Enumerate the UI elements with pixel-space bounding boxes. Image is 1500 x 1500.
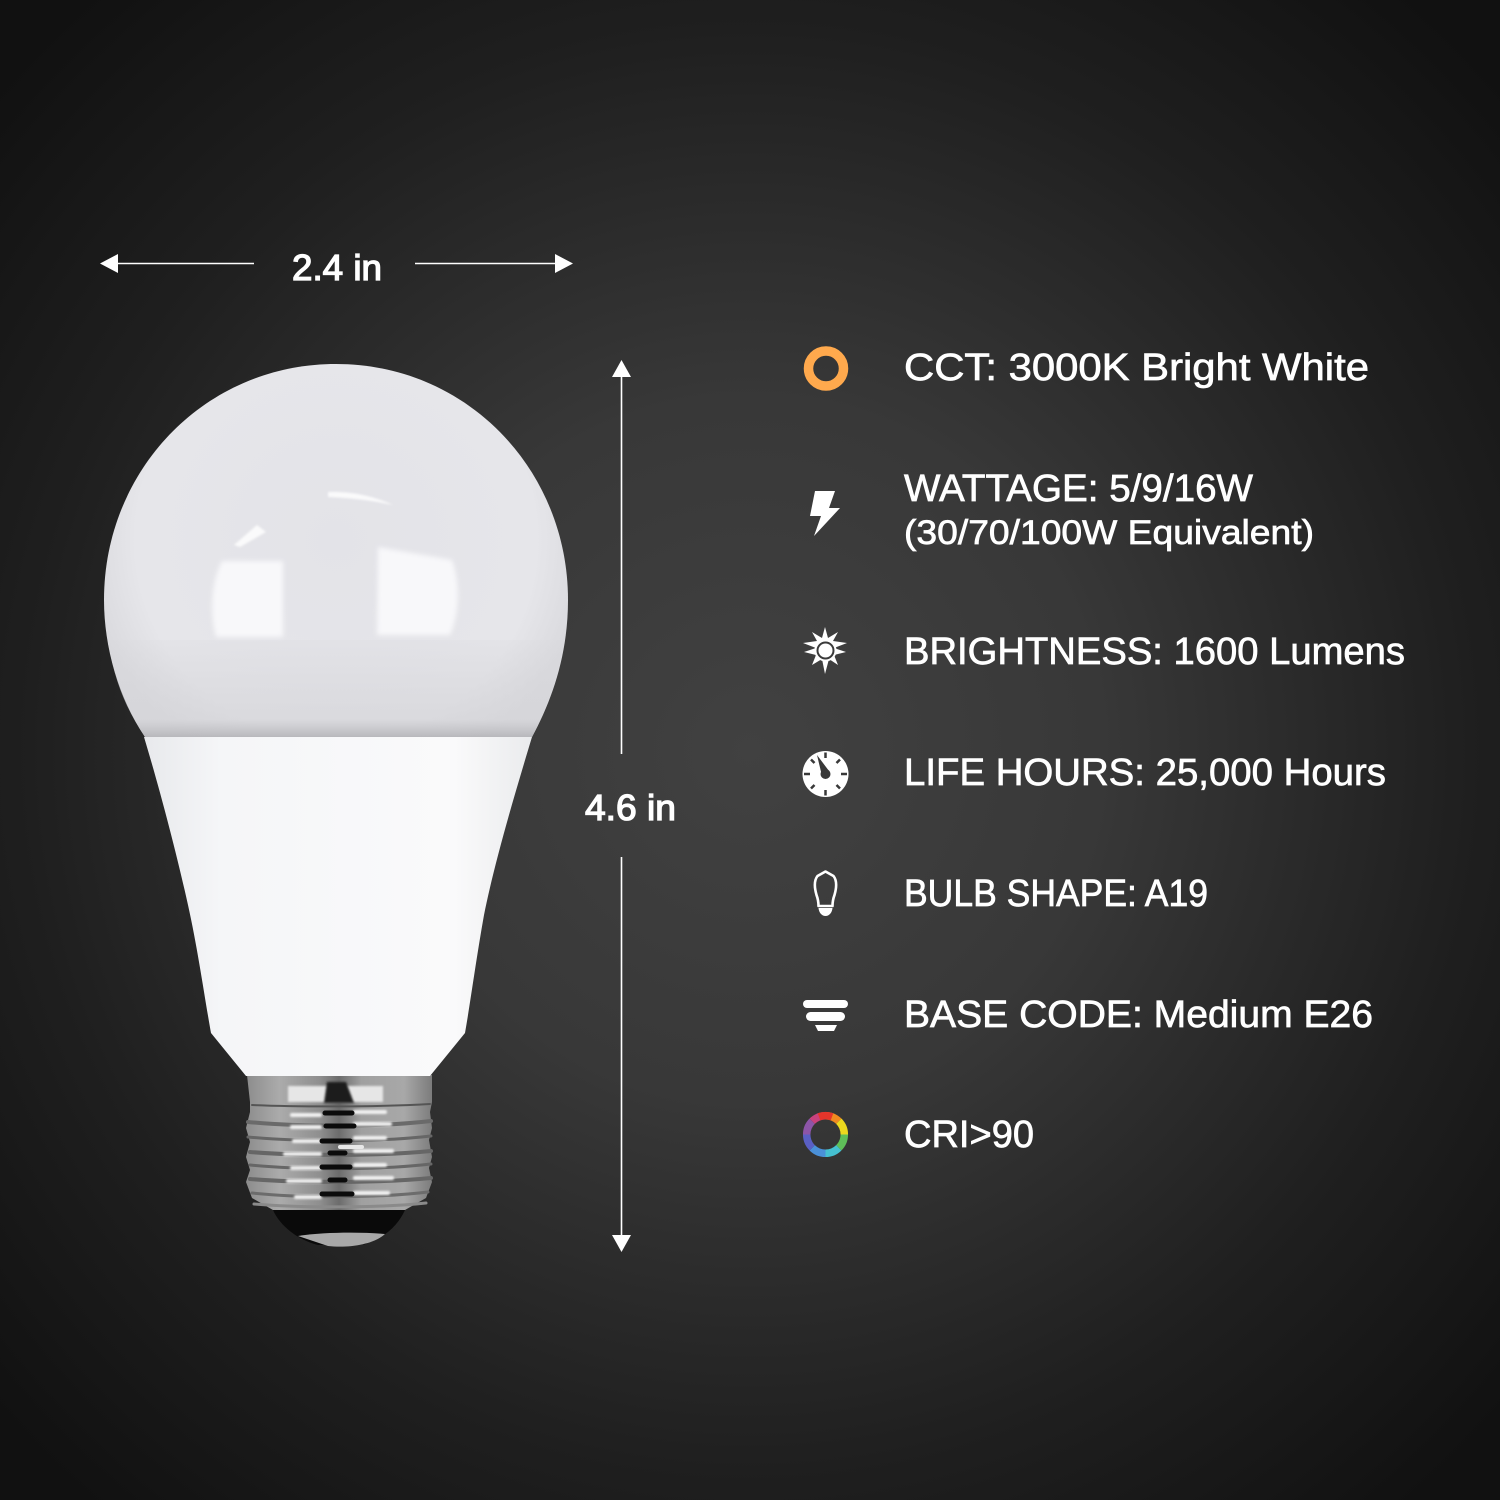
spec: bulb shape: BULB SHAPE: A19 bbox=[904, 873, 1208, 915]
screw collar highlight bbox=[288, 1086, 383, 1102]
spec: wattage bbox=[810, 468, 1314, 552]
width dimension: 2.4 in bbox=[100, 247, 573, 288]
height dimension: 4.6 in: 4.6 in bbox=[585, 787, 676, 828]
bulb screw base bbox=[246, 1075, 432, 1247]
globe lower shading bbox=[108, 640, 564, 737]
spec: CRI: CRI>90 bbox=[904, 1114, 1034, 1156]
light bulb illustration bbox=[104, 364, 568, 1247]
bulb globe bbox=[104, 364, 568, 737]
width dimension: 2.4 in: 2.4 in bbox=[292, 247, 382, 288]
screw cap tip bbox=[273, 1210, 405, 1245]
spec: wattage: (30/70/100W Equivalent) bbox=[904, 514, 1314, 552]
icon: sun bbox=[803, 627, 847, 674]
globe reflections bbox=[212, 547, 458, 637]
height dimension: 4.6 in bbox=[585, 360, 676, 1252]
bulb collar bbox=[144, 737, 532, 1076]
icon: lightning bolt bbox=[810, 491, 840, 536]
icon: rainbow ring bbox=[807, 1116, 844, 1153]
spec: CCT: CCT: 3000K Bright White bbox=[904, 347, 1369, 389]
small reflections bbox=[234, 492, 393, 547]
icon: orange ring bbox=[808, 351, 844, 386]
icon: clock dial bbox=[802, 751, 848, 797]
icon: bulb outline bbox=[815, 872, 836, 916]
spec: bulb shape bbox=[815, 872, 1208, 916]
icon: stacked base bbox=[803, 1000, 848, 1031]
spec: brightness: BRIGHTNESS: 1600 Lumens bbox=[904, 631, 1405, 673]
spec: base code: BASE CODE: Medium E26 bbox=[904, 994, 1373, 1036]
spec: CRI bbox=[807, 1114, 1034, 1156]
spec: wattage: WATTAGE: 5/9/16W bbox=[904, 468, 1253, 510]
spec: life hours: LIFE HOURS: 25,000 Hours bbox=[904, 752, 1386, 794]
